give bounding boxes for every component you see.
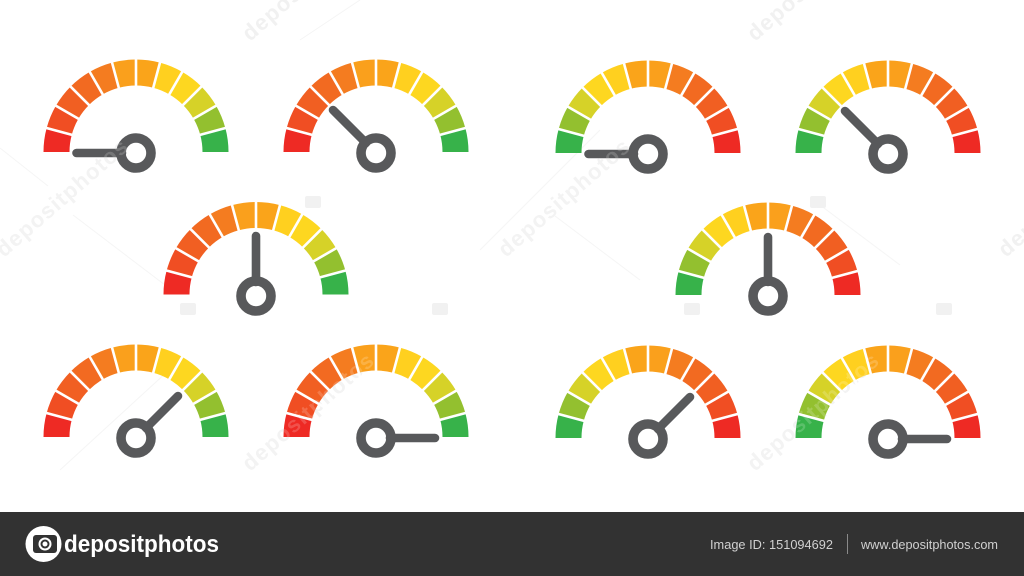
needle 9 bbox=[658, 397, 690, 429]
needle 3 bbox=[588, 150, 634, 158]
divider bbox=[847, 534, 848, 554]
gauge 9: reversed, needle upper right bbox=[551, 338, 745, 454]
gauge 4: reversed, needle upper left bbox=[791, 53, 985, 169]
gauge 2: needle upper left bbox=[279, 52, 473, 168]
watermark overlay on gauges bbox=[0, 134, 884, 476]
needle 8 bbox=[390, 434, 435, 442]
gauge 3: reversed, needle pointing left bbox=[551, 53, 745, 169]
gauge 5: needle pointing up bbox=[159, 194, 353, 311]
logo wordmark: depositphotos bbox=[64, 531, 219, 558]
watermark: depositphotos bbox=[742, 348, 884, 476]
gauge 10: reversed, needle pointing right bbox=[791, 338, 985, 454]
needle 6 bbox=[764, 237, 772, 282]
watermark overlay on gauges: depositphotos bbox=[237, 348, 379, 476]
needle 4 bbox=[845, 111, 878, 144]
needle 2 bbox=[333, 110, 366, 143]
needle 7 bbox=[146, 396, 178, 428]
footer bar bbox=[0, 512, 1024, 576]
gauge 6: reversed, needle pointing up bbox=[671, 195, 865, 311]
needle 10 bbox=[902, 435, 947, 443]
watermark overlay on gauges: depositphotos bbox=[493, 134, 635, 262]
gauge 7: needle upper right bbox=[39, 337, 233, 453]
website url: www.depositphotos.com bbox=[860, 538, 998, 552]
image id: Image ID: 151094692 bbox=[710, 538, 833, 552]
watermark: depositphotos bbox=[237, 348, 379, 476]
needle 1 bbox=[76, 149, 122, 157]
gauge 8: needle pointing right bbox=[279, 337, 473, 453]
icon: camera logo bbox=[26, 526, 62, 562]
watermark overlay on gauges: depositphotos bbox=[742, 348, 884, 476]
needle 5 bbox=[252, 236, 260, 282]
watermark: depositphotos bbox=[493, 134, 635, 262]
gauge 1: needle pointing left bbox=[39, 52, 233, 168]
